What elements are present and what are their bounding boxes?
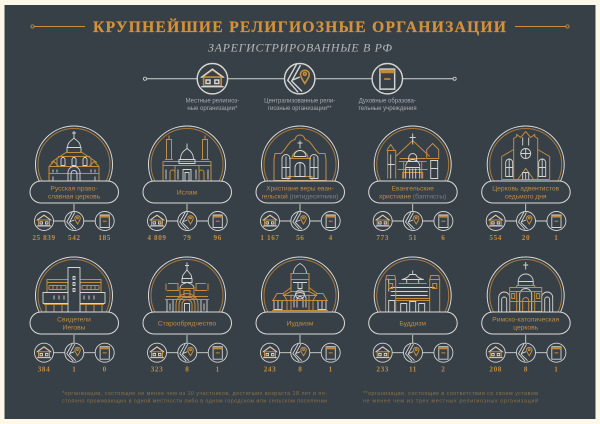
panel: Свидетели Иеговы xyxy=(30,257,118,374)
counts: 8 xyxy=(298,366,302,374)
icon: local xyxy=(373,212,392,230)
icon: centralised xyxy=(516,343,536,362)
connector xyxy=(157,204,218,221)
legend label: centralised: Централизованные рели- xyxy=(264,99,335,105)
name pill xyxy=(256,181,344,203)
building: synagogue xyxy=(262,257,338,334)
footnote: centralised organisations: не менее чем из трех местных религиозных организаций xyxy=(363,398,538,405)
icon: centralised xyxy=(516,212,536,230)
icon: education xyxy=(547,212,566,230)
name pill: Буддизм xyxy=(399,320,426,328)
icon: centralised xyxy=(291,343,310,362)
connector xyxy=(383,204,444,221)
icon: education xyxy=(95,212,114,230)
icon: education xyxy=(434,343,453,362)
counts: 1 167 xyxy=(260,234,280,242)
legend label: local: ные организации* xyxy=(187,106,238,112)
panel: Буддизм xyxy=(369,257,457,374)
counts: 6 xyxy=(441,234,446,242)
name pill: христиане (баптисты) xyxy=(379,194,446,201)
building: old believers church xyxy=(148,257,226,334)
counts: 11 xyxy=(409,366,417,374)
building: baptist church xyxy=(374,126,451,203)
counts: 384 xyxy=(38,366,50,374)
counts: 208 xyxy=(489,366,502,374)
footnote: centralised organisations: **организации, состоящие в соответствии со своим уставом xyxy=(363,391,538,397)
icon: educational institutions xyxy=(372,63,402,94)
icon: education xyxy=(95,343,114,362)
connector xyxy=(157,335,218,353)
connector xyxy=(496,204,557,221)
name pill: гельской (пятидесятники) xyxy=(262,194,338,201)
name pill xyxy=(30,312,118,334)
panel: Иудаизм xyxy=(256,257,344,374)
connector xyxy=(270,335,331,353)
icon: local xyxy=(486,343,505,362)
connector xyxy=(44,204,105,221)
counts: 243 xyxy=(264,366,276,374)
icon: local xyxy=(148,343,166,362)
name pill: Иудаизм xyxy=(287,320,314,328)
name pill: Римско-католическая xyxy=(492,316,560,323)
name pill: Старообрядчество xyxy=(158,320,217,328)
icon: centralised xyxy=(404,343,422,362)
counts: 1 xyxy=(216,366,220,374)
counts: 1 xyxy=(554,234,559,242)
icon: centralised xyxy=(65,343,84,362)
icon: education xyxy=(321,212,340,230)
icon: local xyxy=(260,343,280,362)
icon: local xyxy=(260,212,280,230)
counts: 96 xyxy=(214,234,222,242)
connector xyxy=(496,335,557,353)
icon: centralised xyxy=(65,212,84,230)
counts: 233 xyxy=(376,366,389,374)
name pill xyxy=(30,181,118,203)
connector xyxy=(383,335,444,353)
counts: 4 809 xyxy=(147,234,167,242)
counts: 0 xyxy=(103,366,107,374)
name pill xyxy=(482,312,570,334)
building: mosque xyxy=(148,126,226,203)
counts: 8 xyxy=(185,366,189,374)
subtitle: ЗАРЕГИСТРИРОВАННЫЕ В РФ xyxy=(208,40,392,54)
panel: Римско-католическая церковь xyxy=(482,257,570,374)
icon: local xyxy=(148,212,166,230)
building: adventist church xyxy=(487,126,564,203)
counts: 1 xyxy=(329,366,333,374)
counts: 8 xyxy=(524,366,528,374)
name pill: Церковь адвентистов xyxy=(492,185,560,192)
icon: education xyxy=(321,343,340,362)
icon: centralised xyxy=(291,212,310,230)
counts: 542 xyxy=(68,234,81,242)
icon: local xyxy=(34,212,54,230)
counts: 25 839 xyxy=(32,234,56,242)
name pill xyxy=(482,181,570,203)
name pill: Евангельские xyxy=(392,185,434,192)
counts: 4 xyxy=(329,234,333,242)
name pill: славная церковь xyxy=(48,194,101,201)
panel: Христиане веры евангельской xyxy=(256,126,344,242)
building: datsan xyxy=(374,257,451,334)
panel: Церковь адвентистов седьмого дня xyxy=(482,126,570,242)
name pill: церковь xyxy=(513,325,539,332)
building: orthodox cathedral xyxy=(36,126,112,203)
name pill: Русская право- xyxy=(50,185,98,192)
counts: 56 xyxy=(296,234,304,242)
legend label: education: тельные учреждения xyxy=(358,106,417,112)
counts: 2 xyxy=(441,366,446,374)
footnote: local organisations: *организации, состоящие не менее чем из 10 участников, достигших возраста 18 лет и по- xyxy=(62,391,327,397)
counts: 185 xyxy=(98,234,111,242)
counts: 1 xyxy=(554,366,559,374)
footnote: local organisations: стоянно проживающих в одной местности либо в одном городском или сельском поселении xyxy=(62,398,327,405)
counts: 20 xyxy=(522,234,530,242)
building: Jehovah's Witnesses centre xyxy=(36,257,112,334)
counts: 773 xyxy=(376,234,389,242)
icon: education xyxy=(547,343,566,362)
icon: centralised xyxy=(404,212,422,230)
counts: 79 xyxy=(183,234,191,242)
title: КРУПНЕЙШИЕ РЕЛИГИОЗНЫЕ ОРГАНИЗАЦИИ xyxy=(93,19,506,36)
icon: centralised organisations xyxy=(284,63,315,94)
counts: 51 xyxy=(409,234,417,242)
connector xyxy=(270,204,331,221)
name pill xyxy=(369,181,457,203)
icon: local xyxy=(373,343,392,362)
icon: centralised xyxy=(178,343,197,362)
icon: education xyxy=(208,212,227,230)
panel: Ислам xyxy=(143,126,232,242)
panel: Русская православная церковь xyxy=(30,126,118,242)
legend label: centralised: гиозные организации** xyxy=(268,106,332,112)
counts: 323 xyxy=(151,366,163,374)
legend label: education: Духовные образова- xyxy=(359,99,416,105)
icon: education xyxy=(208,343,227,362)
legend label: local: Местные религиоз- xyxy=(186,99,239,105)
icon: local xyxy=(486,212,505,230)
panel: Евангельские христиане xyxy=(369,126,457,242)
name pill: Ислам xyxy=(177,190,198,196)
name pill: Свидетели xyxy=(57,316,91,323)
legend xyxy=(143,63,456,112)
name pill: Иеговы xyxy=(63,325,86,332)
building: pentecostal church xyxy=(262,126,338,203)
icon: local xyxy=(34,343,54,362)
counts: 554 xyxy=(489,234,502,242)
icon: centralised xyxy=(178,212,197,230)
icon: education xyxy=(434,212,453,230)
connector xyxy=(44,335,105,353)
icon: local organisations xyxy=(197,63,228,94)
building: catholic church xyxy=(487,257,564,334)
name pill: седьмого дня xyxy=(505,194,547,201)
panel: Старообрядчество xyxy=(143,257,232,374)
name pill: Христиане веры еван- xyxy=(266,185,334,192)
counts: 1 xyxy=(72,366,76,374)
